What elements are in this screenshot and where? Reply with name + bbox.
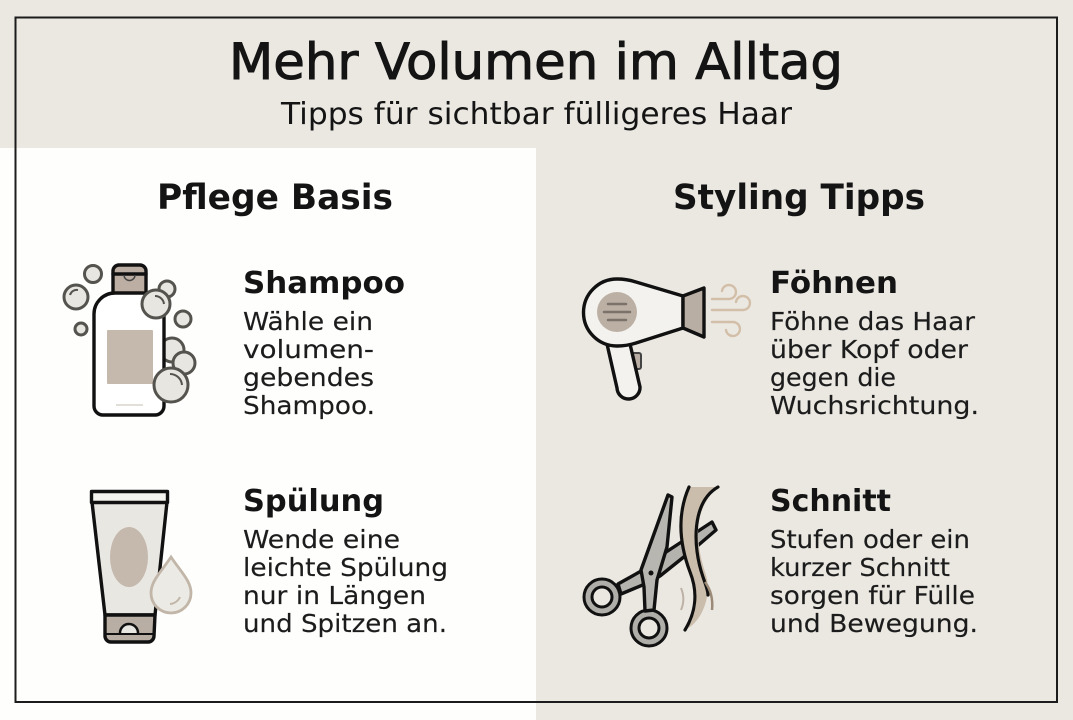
subtitle: Tipps für sichtbar fülligeres Haar: [280, 97, 793, 132]
text block: Schnitt: [770, 484, 978, 638]
icon: hair dryer: [584, 279, 750, 399]
text block: Schnitt: sorgen für Fülle: [770, 581, 975, 610]
text block: Spülung: und Spitzen an.: [243, 609, 447, 638]
text block: Schnitt: Stufen oder ein: [770, 525, 970, 554]
text block: Spülung: Wende eine: [243, 525, 400, 554]
heading: Pflege Basis: Pflege Basis: [157, 178, 393, 218]
text block: Schnitt: kurzer Schnitt: [770, 553, 950, 582]
panel: Styling Tipps: [584, 178, 979, 646]
text block: Föhnen: über Kopf oder: [770, 335, 969, 364]
text block: Spülung: [243, 484, 448, 638]
text block: Föhnen: gegen die: [770, 363, 896, 392]
icon: conditioner tube with drop: [92, 492, 191, 642]
text block: Spülung: leichte Spülung: [243, 553, 448, 582]
text block: Shampoo: volumen-: [243, 335, 374, 364]
text block: Föhnen: Föhnen: [770, 266, 898, 301]
text block: Shampoo: Shampoo.: [243, 391, 375, 420]
text block: Spülung: Spülung: [243, 484, 384, 519]
icon: scissors cutting hair: [584, 487, 718, 646]
text block: Föhnen: [770, 266, 979, 420]
panel: Pflege Basis: [64, 178, 448, 642]
text block: Shampoo: gebendes: [243, 363, 374, 392]
title: Mehr Volumen im Alltag: [229, 33, 843, 91]
text block: Shampoo: [243, 266, 405, 420]
text block: Föhnen: Föhne das Haar: [770, 307, 976, 336]
icon: shampoo bottle with bubbles: [64, 265, 195, 415]
text block: Shampoo: Shampoo: [243, 266, 405, 301]
heading: Styling Tipps: Styling Tipps: [673, 178, 925, 218]
text block: Shampoo: Wähle ein: [243, 307, 373, 336]
text block: Föhnen: Wuchsrichtung.: [770, 391, 979, 420]
text block: Spülung: nur in Längen: [243, 581, 426, 610]
text block: Schnitt: und Bewegung.: [770, 609, 978, 638]
text block: Schnitt: Schnitt: [770, 484, 891, 519]
